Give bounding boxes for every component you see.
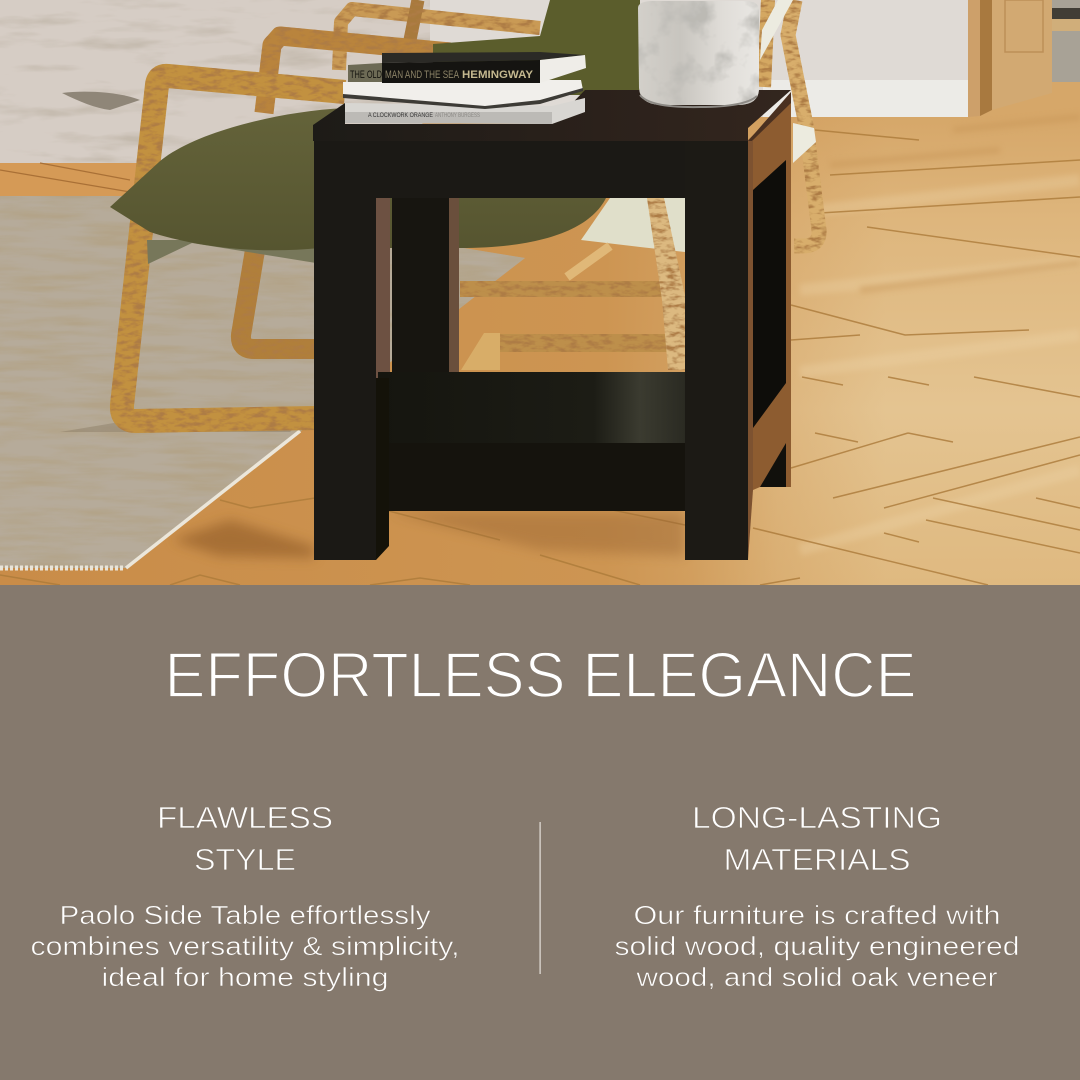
front legs [314,141,376,560]
text block: flawless style: Paolo Side Table effortlessly [60,900,430,930]
table apron [376,141,686,198]
floor [0,0,1080,585]
books: HEMINGWAY [462,69,534,81]
text block: flawless style: ideal for home styling [102,962,388,992]
books: ANTHONY BURGESS [435,112,480,119]
heading: long-lasting materials: MATERIALS [724,842,910,877]
heading: long-lasting materials: LONG-LASTING [692,800,942,835]
heading: flawless style: STYLE [194,842,296,877]
table back leg [392,196,450,376]
table top [313,90,791,141]
rug [0,196,525,568]
title: EFFORTLESS ELEGANCE [164,639,916,711]
text block: long-lasting materials: wood, and solid oak veneer [635,962,998,992]
wall and marble panel [0,0,968,196]
text block: long-lasting materials: solid wood, quality engineered [614,931,1020,961]
chair frame [122,0,819,421]
lower shelf [378,372,686,443]
product photo: side table in a living room [0,0,1080,585]
text block: flawless style [30,900,460,992]
heading: long-lasting materials [692,800,942,877]
text block: long-lasting materials [614,900,1020,992]
text block: flawless style: combines versatility & simplicity, [30,931,460,961]
table side panel [747,92,791,490]
books [343,52,586,124]
text block: long-lasting materials: Our furniture is crafted with [634,900,1000,930]
books: THE OLD [350,69,382,81]
divider [540,822,541,974]
heading: flawless style [157,800,333,877]
chair seat cushion [110,0,816,370]
door [968,0,1080,117]
vase [638,1,759,107]
side table [313,90,791,560]
heading: flawless style: FLAWLESS [157,800,333,835]
books: MAN AND THE SEA [385,69,459,81]
panel: text area [0,585,1080,1080]
books: A CLOCKWORK ORANGE [368,112,434,119]
